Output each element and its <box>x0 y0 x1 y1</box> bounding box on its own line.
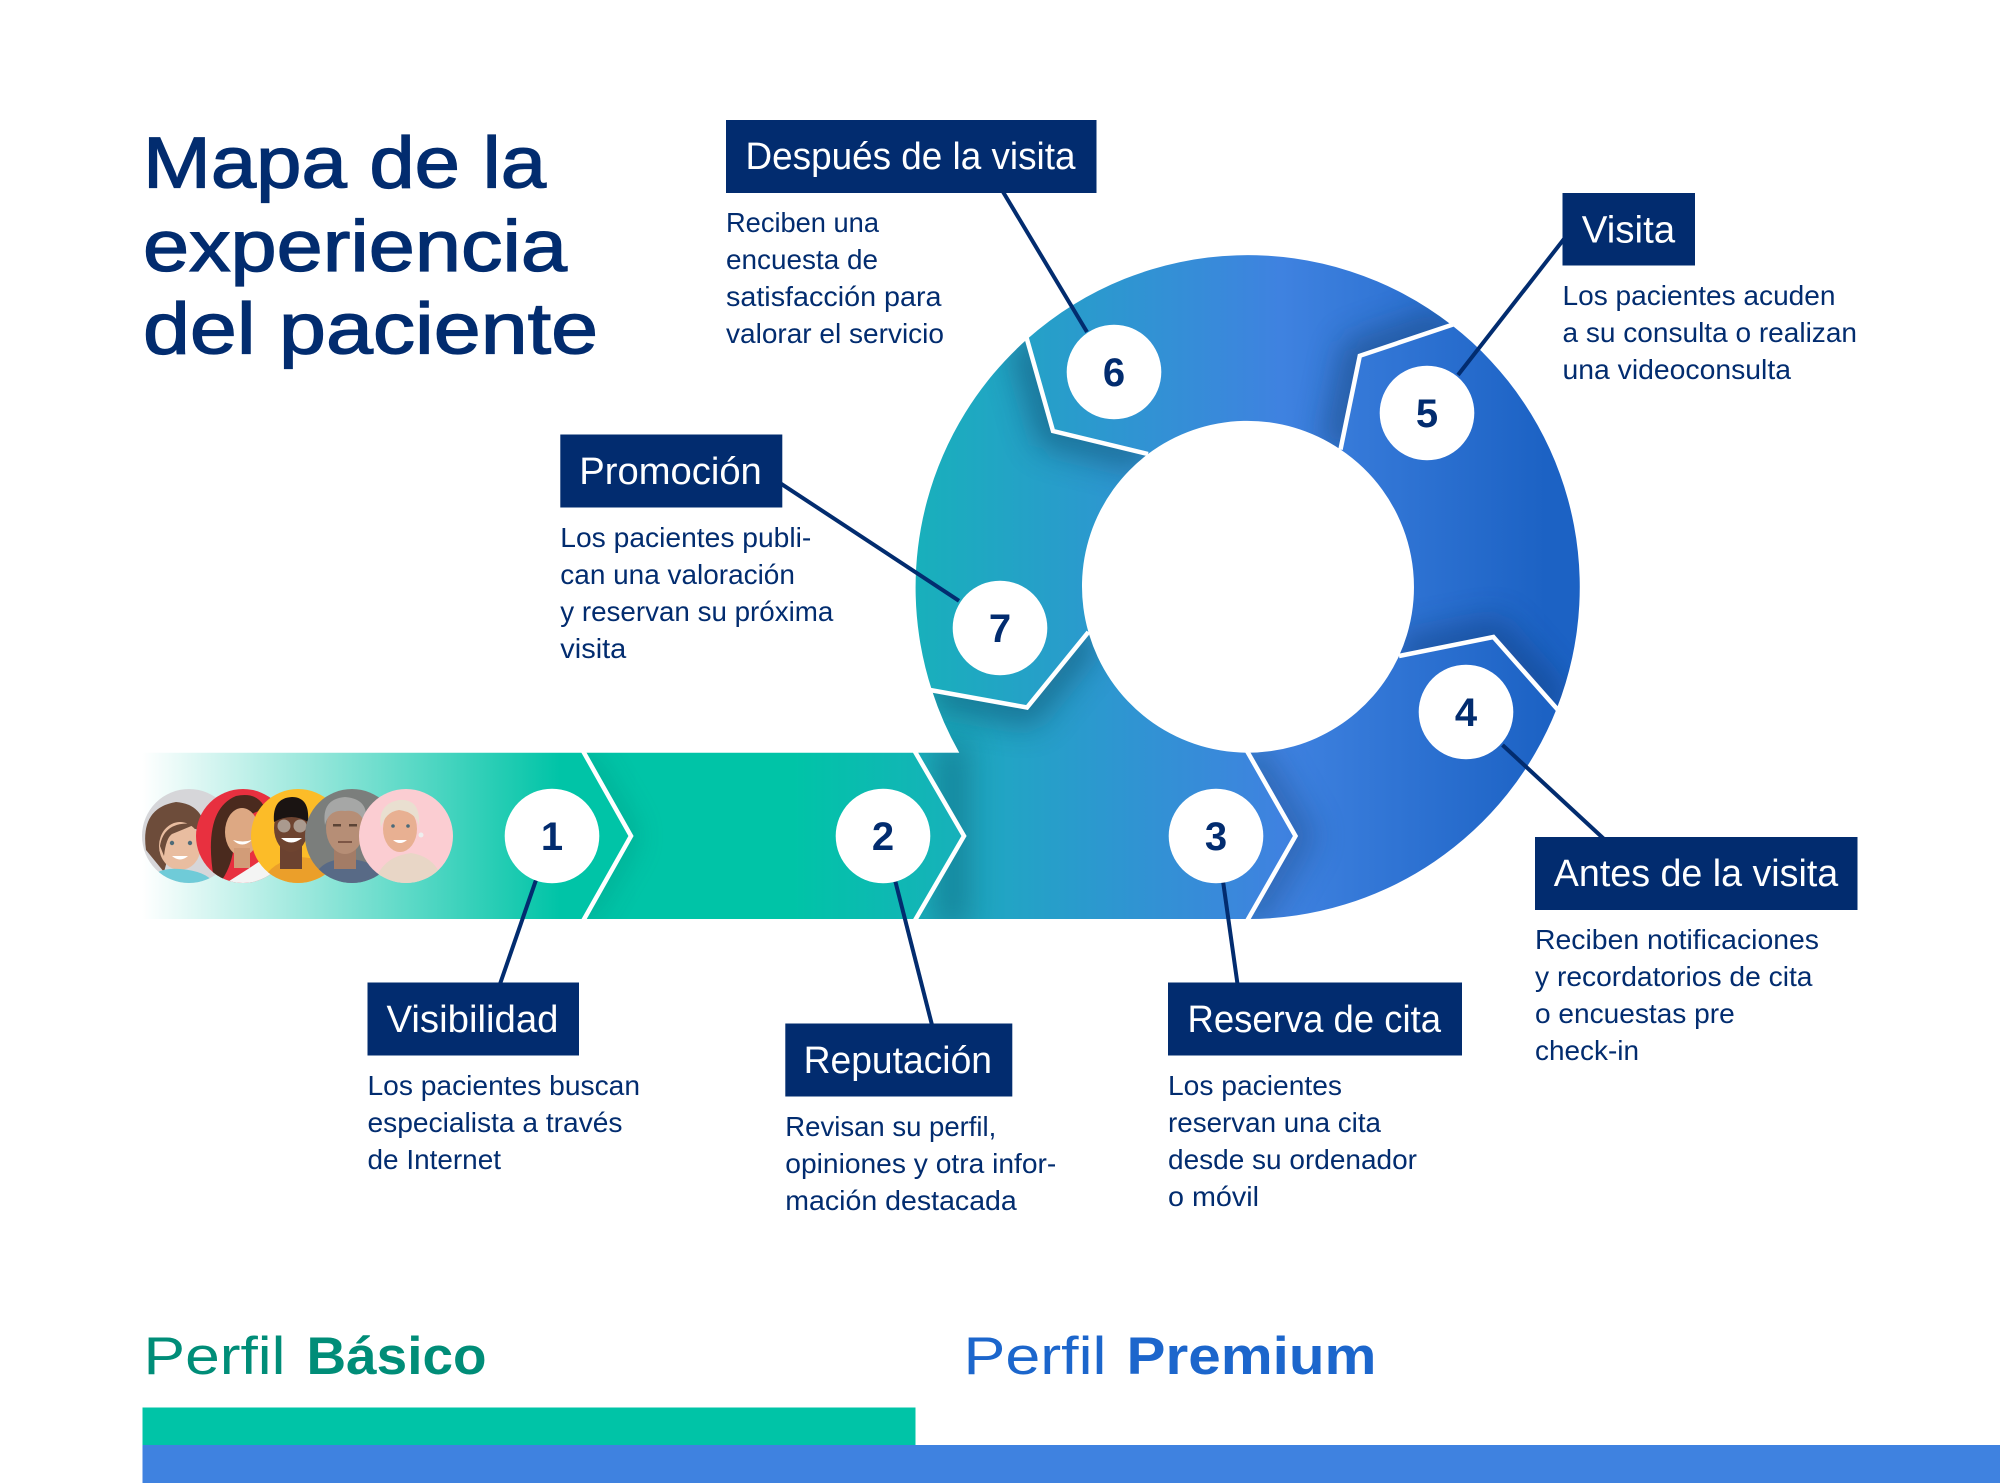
number badge 1: 1 <box>541 815 563 859</box>
description 4: o encuestas pre <box>1535 998 1735 1029</box>
description 4 <box>1535 924 1819 1066</box>
legend label: Perfil Básico: Perfil <box>144 1327 286 1386</box>
label box: Visita <box>1562 193 1695 266</box>
description 6: encuesta de <box>726 244 878 275</box>
description 1: de Internet <box>368 1144 501 1175</box>
number badge 7 <box>953 581 1047 675</box>
description 7: can una valoración <box>560 559 795 590</box>
description 3: reservan una cita <box>1168 1107 1381 1138</box>
label box: Promoción <box>560 434 782 508</box>
description 5 <box>1562 280 1857 385</box>
segment 2: reputation chevron <box>579 753 964 919</box>
legend label: Perfil Básico: Básico <box>306 1327 486 1386</box>
number badge 6 <box>1067 325 1161 419</box>
description 5: una videoconsulta <box>1562 354 1791 385</box>
segment 5: visit <box>1340 325 1580 708</box>
step 3: reserva de cita <box>1168 789 1462 1212</box>
description 7 <box>560 522 834 664</box>
label box: Antes de la visita: Antes de la visita <box>1554 853 1839 895</box>
description 1: especialista a través <box>368 1107 622 1138</box>
label box: Reserva de cita <box>1168 982 1462 1056</box>
description 2: mación destacada <box>785 1185 1017 1216</box>
segment 4: before visit <box>1247 637 1557 919</box>
description 2 <box>785 1111 1056 1216</box>
description 5: a su consulta o realizan <box>1562 317 1857 348</box>
legend bar: basic <box>142 1408 916 1446</box>
step 4: antes de la visita <box>1419 665 1858 1066</box>
portrait: child <box>142 789 216 883</box>
portrait: older woman on pink <box>359 789 453 883</box>
label box: Antes de la visita <box>1535 837 1858 910</box>
step 6: despues de la visita <box>726 120 1161 419</box>
description 1: Los pacientes buscan <box>368 1070 640 1101</box>
number badge 7: 7 <box>989 607 1011 651</box>
number badge 6: 6 <box>1103 351 1125 395</box>
segment 3: booking <box>915 632 1296 930</box>
description 6: valorar el servicio <box>726 318 944 349</box>
patient portraits <box>142 789 453 883</box>
segment 1: visibility chevron <box>142 753 631 919</box>
step 1: visibilidad <box>368 789 640 1175</box>
step 5: visita <box>1380 193 1857 460</box>
segment 7: promotion <box>916 339 1148 708</box>
title <box>143 124 598 370</box>
label box: Reserva de cita: Reserva de cita <box>1188 999 1442 1041</box>
number badge 5: 5 <box>1416 392 1438 436</box>
segment 6: after visit <box>1027 255 1452 454</box>
label box: Reputación: Reputación <box>804 1040 992 1082</box>
description 3: desde su ordenador <box>1168 1144 1417 1175</box>
portrait: older man on grey <box>305 789 379 883</box>
description 7: Los pacientes publi- <box>560 522 811 553</box>
legend label: Perfil Premium: Perfil <box>964 1327 1106 1386</box>
description 2: opiniones y otra infor- <box>785 1148 1056 1179</box>
label box: Promoción: Promoción <box>579 451 762 493</box>
description 3: Los pacientes <box>1168 1070 1342 1101</box>
title: Mapa de la <box>143 124 547 204</box>
number badge 4: 4 <box>1455 691 1478 735</box>
number badge 5 <box>1380 366 1474 460</box>
description 5: Los pacientes acuden <box>1562 280 1836 311</box>
number badge 1 <box>505 789 599 883</box>
description 3 <box>1168 1070 1417 1212</box>
legend bar: premium <box>142 1445 2000 1483</box>
description 7: y reservan su próxima <box>560 596 834 627</box>
journey diagram: chevrons and ring <box>142 255 1580 930</box>
label box: Reputación <box>785 1024 1012 1096</box>
label box: Visibilidad <box>368 982 579 1056</box>
description 4: y recordatorios de cita <box>1535 961 1813 992</box>
number badge 2 <box>836 789 930 883</box>
step 2: reputacion <box>785 789 1056 1216</box>
legend label: Perfil Premium: Premium <box>1126 1327 1376 1386</box>
description 3: o móvil <box>1168 1181 1259 1212</box>
title: del paciente <box>143 290 598 370</box>
label box: Después de la visita: Después de la visita <box>746 136 1076 178</box>
portrait: man with glasses on yellow <box>251 789 325 883</box>
legend label: Perfil Básico <box>144 1327 486 1386</box>
portrait: woman on red <box>196 789 270 883</box>
label box: Después de la visita <box>726 120 1096 193</box>
description 7: visita <box>560 633 627 664</box>
label box: Visita: Visita <box>1582 210 1676 252</box>
description 6: Reciben una <box>726 207 879 238</box>
description 6: satisfacción para <box>726 281 942 312</box>
number badge 4 <box>1419 665 1513 759</box>
legend label: Perfil Premium <box>964 1327 1376 1386</box>
description 4: Reciben notificaciones <box>1535 924 1819 955</box>
number badge 3: 3 <box>1205 815 1227 859</box>
label box: Visibilidad: Visibilidad <box>386 999 558 1041</box>
description 2: Revisan su perfil, <box>785 1111 996 1142</box>
number badge 3 <box>1169 789 1263 883</box>
title: experiencia <box>143 207 568 287</box>
step 7: promocion <box>560 434 1047 675</box>
description 6 <box>726 207 944 349</box>
number badge 2: 2 <box>872 815 894 859</box>
description 4: check-in <box>1535 1035 1639 1066</box>
description 1 <box>368 1070 640 1175</box>
